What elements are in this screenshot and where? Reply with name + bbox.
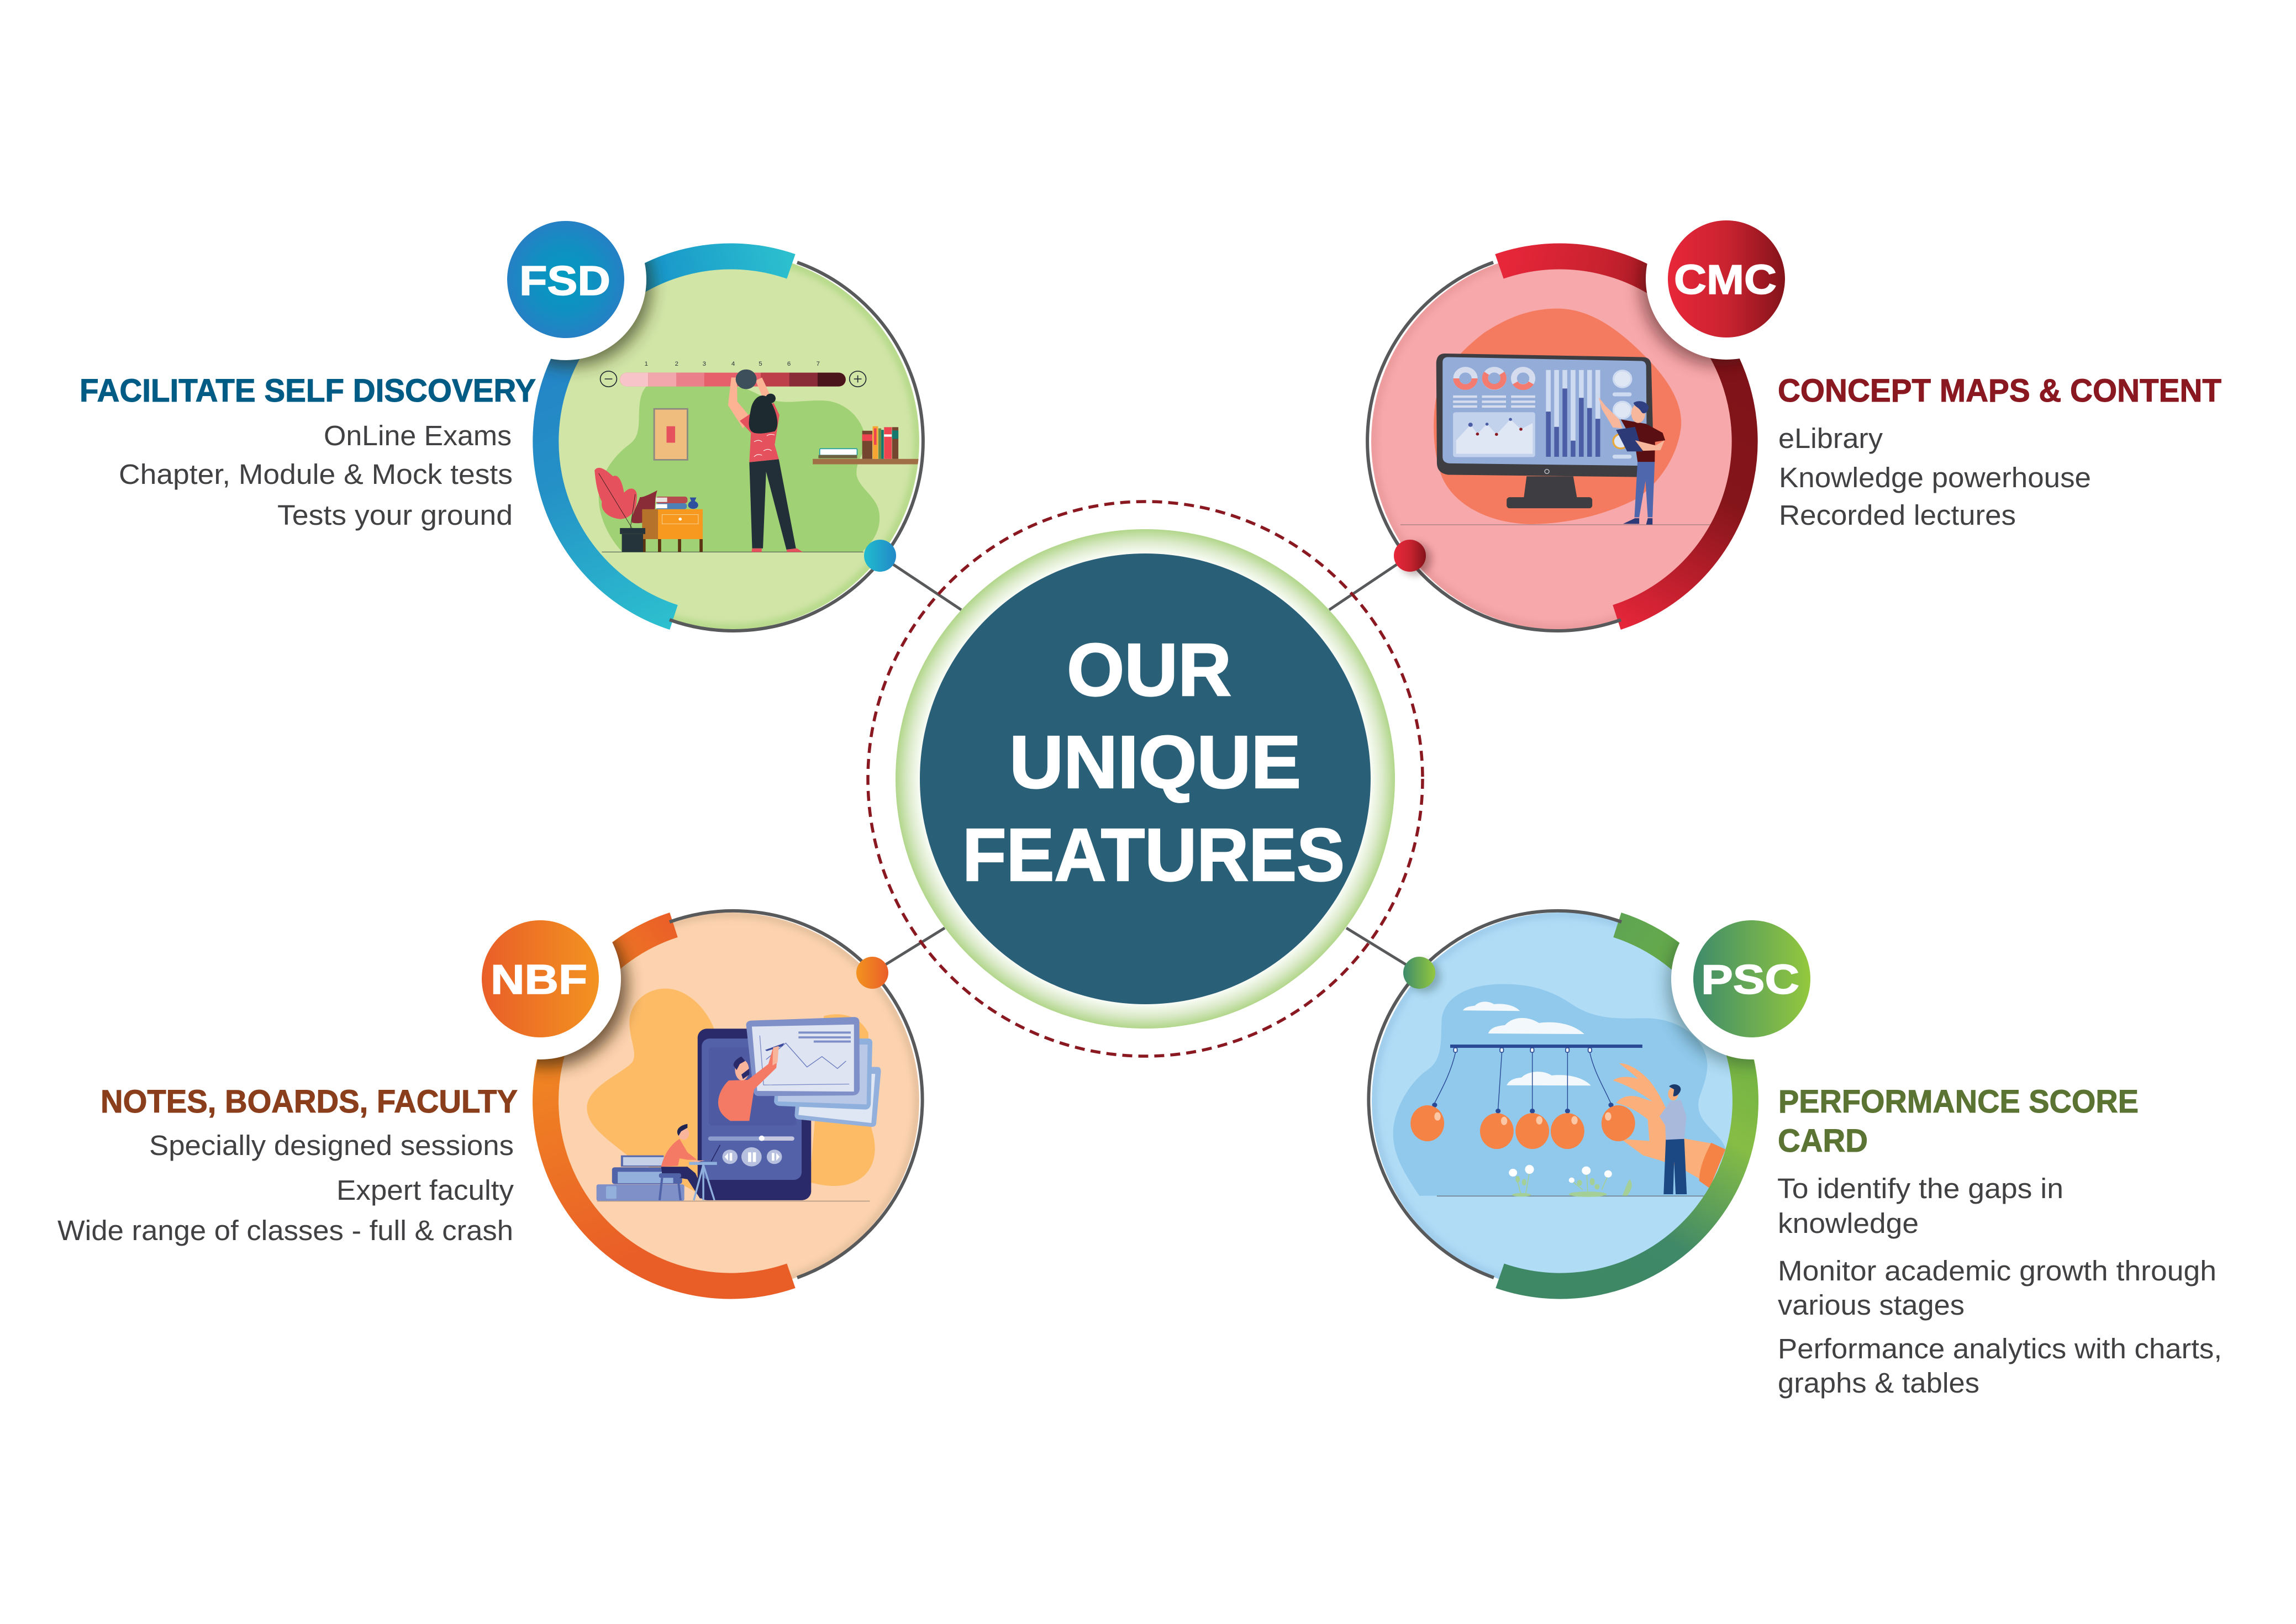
PSC disc: [1372, 913, 1749, 1289]
illustration: woman adjusting scale: 2: [675, 361, 678, 367]
centre hub: our unique features: [896, 529, 1395, 1029]
NBF outline: [670, 911, 923, 1278]
text: CMC: Recorded lectures: [1779, 499, 2016, 531]
NBF badge: [460, 898, 628, 1067]
PSC outline: [1368, 911, 1621, 1278]
CMC arc: [1499, 256, 1745, 618]
CMC outline: [1367, 262, 1621, 631]
text: PSC: PERFORMANCE SCORE: [1778, 1084, 2139, 1120]
CMC disc: [1371, 253, 1748, 630]
FSD disc: [543, 253, 919, 630]
PSC arc: [1500, 925, 1745, 1286]
illustration: woman adjusting scale: [594, 361, 922, 552]
text: NBF: [57, 1084, 518, 1246]
NBF connector dot: [856, 957, 888, 989]
hub disc: [920, 553, 1371, 1004]
FSD arc: [546, 256, 791, 618]
text: FSD: OnLine Exams: [324, 420, 512, 451]
text: CMC: eLibrary: [1778, 423, 1883, 454]
hub title: [962, 628, 1345, 897]
text: PSC: Performance analytics with charts,: [1778, 1333, 2222, 1364]
panel: NBF circle: [460, 898, 923, 1289]
panel: CMC circle: [1367, 198, 1807, 631]
text: PSC: [1777, 1084, 2222, 1399]
connector lines: [872, 556, 1419, 973]
FSD badge: [507, 221, 663, 378]
PSC badge: PSC: [1701, 956, 1799, 1003]
illustration: woman adjusting scale: 4: [731, 361, 735, 367]
CMC connector dot: [1394, 540, 1431, 575]
hub title: FEATURES: [962, 813, 1345, 897]
NBF rim shading: [544, 914, 918, 1288]
hub title: OUR: [1067, 628, 1231, 711]
text: PSC: knowledge: [1778, 1208, 1919, 1239]
illustration: dashboard monitor with presenter: [1400, 309, 1711, 525]
text: NBF: Specially designed sessions: [149, 1130, 514, 1161]
illustration: woman adjusting scale: 1: [645, 361, 648, 367]
panel: PSC circle: [1368, 898, 1832, 1289]
text: PSC: To identify the gaps in: [1777, 1173, 2063, 1204]
dashed orbit circle: [868, 502, 1423, 1056]
CMC badge: [1630, 220, 1785, 376]
illustration: woman adjusting scale: 7: [817, 361, 820, 367]
text: FSD: Tests your ground: [277, 499, 513, 531]
illustration: woman adjusting scale: 3: [703, 361, 706, 367]
PSC badge: [1667, 898, 1832, 1065]
PSC connector dot: [1403, 957, 1441, 993]
text: FSD: [80, 373, 536, 531]
FSD rim shading: [673, 263, 919, 629]
CMC badge: CMC: [1674, 256, 1777, 303]
illustration: woman adjusting scale: 5: [759, 361, 762, 367]
FSD outline: [670, 262, 923, 631]
text: PSC: Monitor academic growth through: [1778, 1255, 2216, 1286]
hub glow ring: [896, 529, 1395, 1029]
text: CMC: CONCEPT MAPS & CONTENT: [1778, 373, 2221, 409]
text: NBF: Wide range of classes - full & crash: [57, 1215, 513, 1246]
text: NBF: Expert faculty: [336, 1174, 514, 1206]
illustration: woman adjusting scale: 6: [787, 361, 791, 367]
text: PSC: graphs & tables: [1778, 1367, 1979, 1399]
hub title: UNIQUE: [1009, 720, 1301, 804]
illustration: online lecture on tablet: [587, 989, 881, 1201]
PSC rim shading: [1373, 914, 1747, 1288]
panel: FSD circle: [485, 199, 923, 631]
NBF badge: NBF: [491, 956, 587, 1003]
FSD connector dot: [864, 540, 896, 572]
illustration: newton cradle and hand: [1393, 984, 1725, 1197]
text: NBF: NOTES, BOARDS, FACULTY: [101, 1084, 518, 1120]
text: FSD: FACILITATE SELF DISCOVERY: [80, 373, 536, 409]
NBF disc: [543, 913, 919, 1289]
text: PSC: CARD: [1778, 1123, 1868, 1159]
text: FSD: Chapter, Module & Mock tests: [119, 458, 513, 490]
text: CMC: Knowledge powerhouse: [1779, 462, 2091, 493]
text: CMC: [1778, 373, 2221, 531]
CMC rim shading: [1371, 263, 1618, 629]
FSD badge: FSD: [519, 257, 610, 304]
NBF arc: [546, 925, 791, 1286]
text: PSC: various stages: [1778, 1289, 1965, 1321]
